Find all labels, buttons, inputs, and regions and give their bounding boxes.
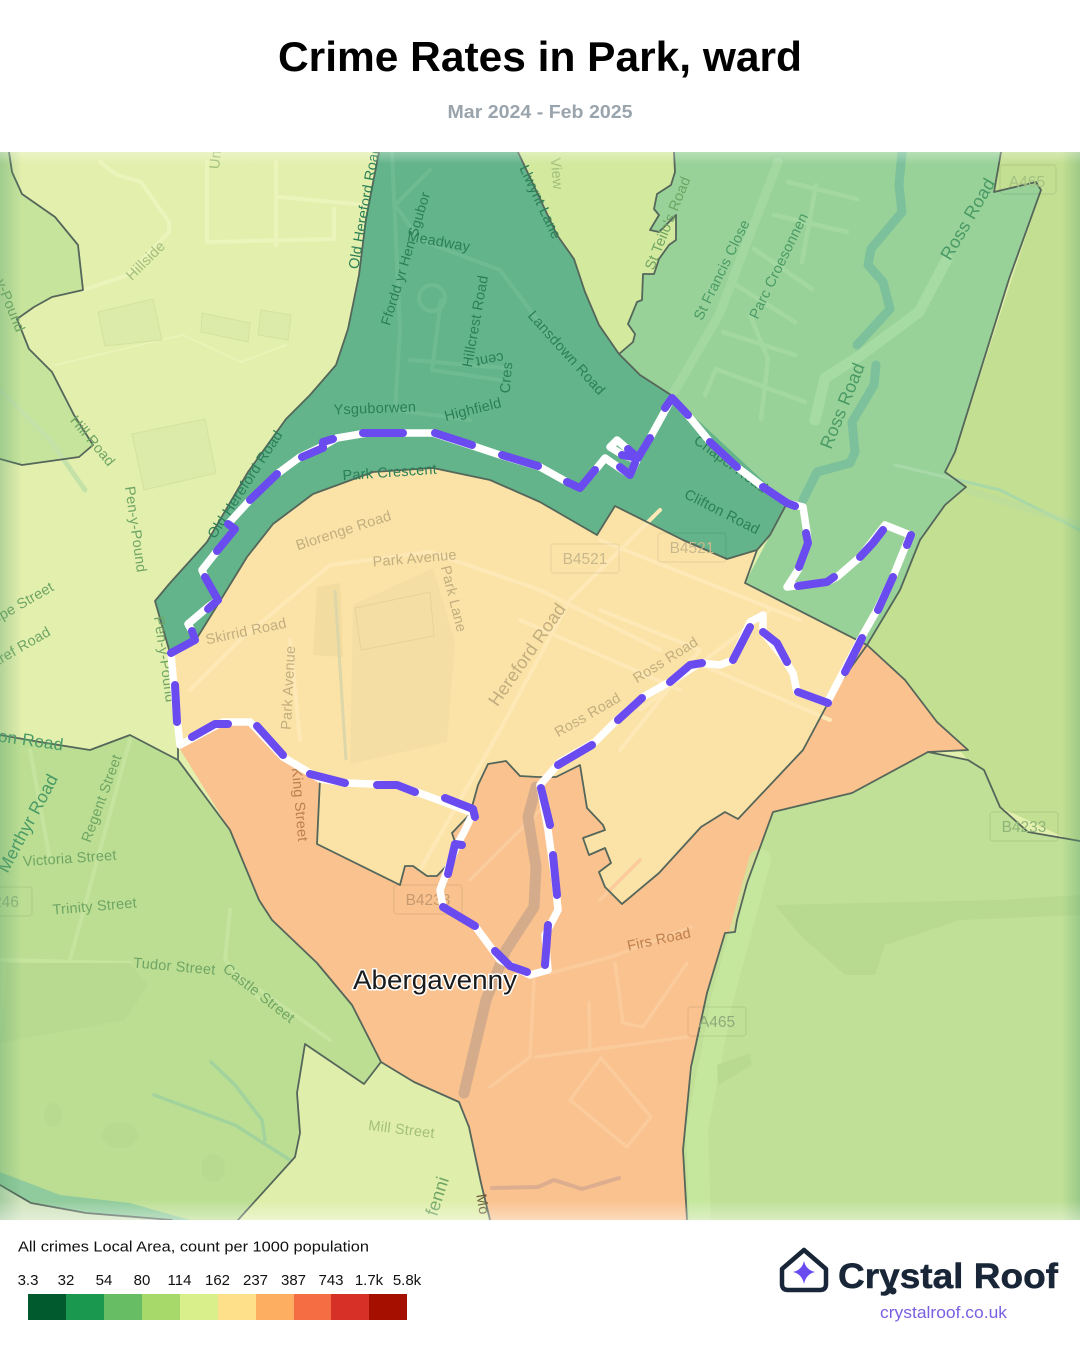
road labels: Mill Street	[367, 1118, 436, 1142]
subtitle: date range: Mar 2024 - Feb 2025	[448, 101, 632, 122]
ward boundary: white line	[171, 398, 910, 975]
road labels: Old Hereford Road	[205, 428, 286, 542]
map background	[0, 152, 1064, 1105]
icon: house with sparkle	[782, 1250, 826, 1290]
road labels: St Teilo's Road	[642, 175, 694, 272]
road labels: View	[547, 157, 565, 191]
area: right upper green	[867, 152, 1080, 845]
road labels: Old Hereford Road	[346, 144, 384, 270]
road labels: Hillside	[123, 238, 169, 284]
road labels: Park Crescent	[342, 462, 437, 484]
road labels	[0, 144, 1046, 1218]
road shields	[0, 165, 1058, 1036]
legend values: 1.7k	[355, 1272, 384, 1289]
road labels: Hill Road	[66, 413, 118, 470]
buildings and plots top-left	[98, 299, 291, 490]
road labels: Chapel Road	[691, 433, 770, 497]
road labels: B4521	[670, 540, 714, 557]
road labels: Mo	[472, 1193, 492, 1216]
legend values: 32	[58, 1272, 74, 1289]
legend title: All crimes Local Area, count per 1000 population	[18, 1238, 369, 1256]
road labels: Cres	[498, 361, 516, 394]
area: top-centre light green	[518, 152, 676, 354]
legend values: 743	[318, 1272, 344, 1289]
road labels: Llwynt Lane	[516, 163, 564, 242]
legend values: 80	[134, 1272, 150, 1289]
road labels: Hereford Road	[484, 599, 570, 710]
road labels: Un	[207, 150, 225, 170]
road labels: Skirrid Road	[204, 616, 288, 648]
road labels: Ross Road	[816, 360, 869, 452]
road labels: Victoria Street	[22, 848, 117, 870]
logo: Crystal Roof	[782, 1250, 1058, 1322]
area: yellow ward	[170, 468, 857, 904]
road labels: B4521	[563, 551, 607, 568]
road labels: Firs Road	[626, 926, 692, 955]
legend values: 114	[168, 1272, 191, 1289]
street network	[0, 152, 947, 1220]
area: lower-left green	[0, 735, 381, 1220]
rivers and streams	[0, 152, 1080, 1189]
road labels: Trinity Street	[52, 895, 137, 919]
legend values: 237	[243, 1272, 268, 1289]
strip along bottom-left river	[0, 1186, 159, 1220]
road labels: B4233	[1002, 819, 1046, 836]
legend colour scale	[28, 1294, 407, 1320]
road labels: Park Avenue	[279, 645, 299, 730]
road labels: Highfield	[443, 395, 503, 425]
road labels: Ross Road	[936, 175, 999, 263]
road labels: B4233	[406, 892, 450, 909]
area: top-left green corner	[0, 152, 93, 465]
area: orange	[178, 640, 968, 1220]
road labels: St Francis Close	[691, 217, 754, 323]
legend values: 54	[96, 1272, 112, 1289]
website url: crystalroof.co.uk	[880, 1304, 1008, 1322]
area: lower-centre light green	[238, 1044, 490, 1220]
sports ground in yellow ward	[322, 584, 434, 760]
title: Crime Rates in Park, ward	[278, 33, 802, 80]
legend	[18, 1238, 422, 1320]
road labels: Ysguborwen	[333, 400, 416, 418]
road labels: A465	[1009, 174, 1045, 191]
area: right lower green	[683, 752, 1080, 1220]
road labels: Ffordd yr Hen Sgubor	[377, 190, 433, 327]
legend values: 5.8k	[393, 1272, 422, 1289]
road labels: King Street	[288, 767, 310, 842]
legend values: 3.3	[18, 1272, 38, 1289]
choropleth map	[0, 144, 1080, 1220]
road labels: Lansdown Road	[524, 308, 608, 399]
road labels: cent	[474, 349, 505, 369]
area: ward-side mid green	[619, 152, 1041, 645]
ward boundary: purple dashes	[171, 398, 911, 972]
area: dark green	[155, 152, 787, 653]
road labels: Clifton Road	[682, 487, 762, 538]
road labels: Castle Street	[219, 961, 297, 1027]
dark woodland patches	[51, 900, 1056, 1084]
legend values: 387	[281, 1272, 306, 1289]
wordmark: Crystal Roof	[838, 1257, 1058, 1296]
legend values	[18, 1272, 422, 1289]
road labels: Pen-y-Pound	[121, 485, 149, 574]
road labels: Park Lane	[437, 564, 469, 634]
road labels: Regent Street	[79, 753, 126, 845]
legend values: 162	[205, 1272, 230, 1289]
road labels: Park Avenue	[372, 547, 457, 571]
keyhole on wordmark y	[890, 1288, 896, 1294]
road labels: Ross Road	[630, 634, 701, 687]
road labels: Parc Croesonnen	[747, 211, 812, 322]
area outlines	[0, 152, 1080, 1220]
road labels: fenni	[422, 1174, 453, 1218]
place label: Abergavenny: Abergavenny	[353, 965, 518, 995]
map edge fades	[0, 152, 1080, 1220]
road labels: Ross Road	[552, 690, 624, 741]
road labels: Pen-y-Pound	[150, 615, 178, 704]
road labels: Meadway	[406, 229, 472, 256]
road labels: A465	[699, 1014, 735, 1031]
road labels: Tudor Street	[133, 955, 216, 979]
road labels: Blorenge Road	[294, 508, 393, 554]
road labels: Hillcrest Road	[460, 274, 492, 369]
